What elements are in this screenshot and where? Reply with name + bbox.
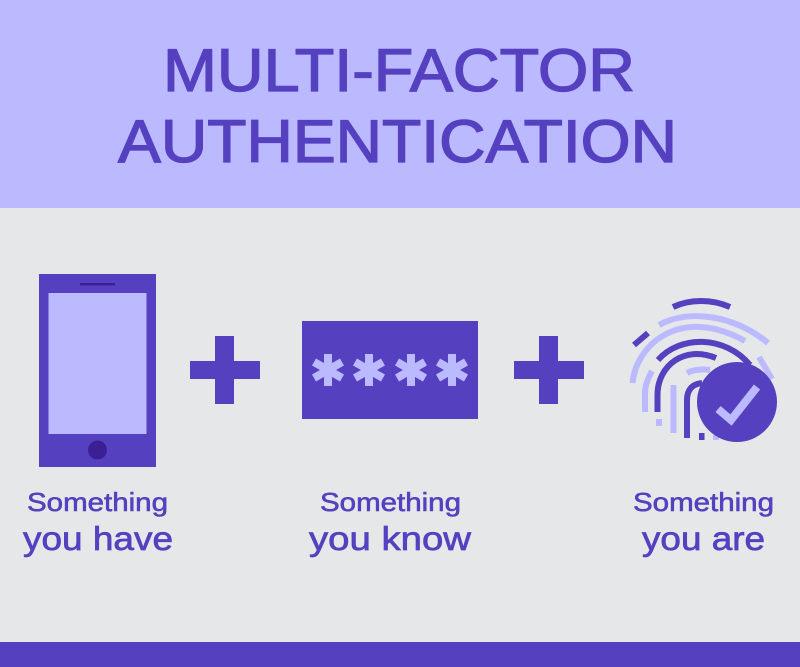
- label: something you know: you know: [309, 520, 471, 557]
- label: something you know: [309, 487, 471, 557]
- plus sign 1: [190, 336, 260, 404]
- label: something you are: [633, 487, 774, 557]
- label: something you are: Something: [633, 487, 774, 517]
- icon: fingerprint with check: [632, 301, 777, 442]
- icon: smartphone: [39, 274, 156, 467]
- label: something you know: Something: [320, 487, 461, 517]
- title: MULTI-FACTOR: [163, 37, 635, 104]
- icon: password box: [302, 321, 478, 419]
- footer band: [0, 642, 800, 667]
- label: something you are: you are: [642, 520, 765, 557]
- label: something you have: [23, 487, 173, 557]
- title: AUTHENTICATION: [118, 108, 677, 175]
- label: something you have: Something: [27, 487, 168, 517]
- header band: [0, 0, 800, 208]
- label: something you have: you have: [23, 520, 173, 557]
- plus sign 2: [514, 336, 584, 404]
- title: [118, 37, 677, 175]
